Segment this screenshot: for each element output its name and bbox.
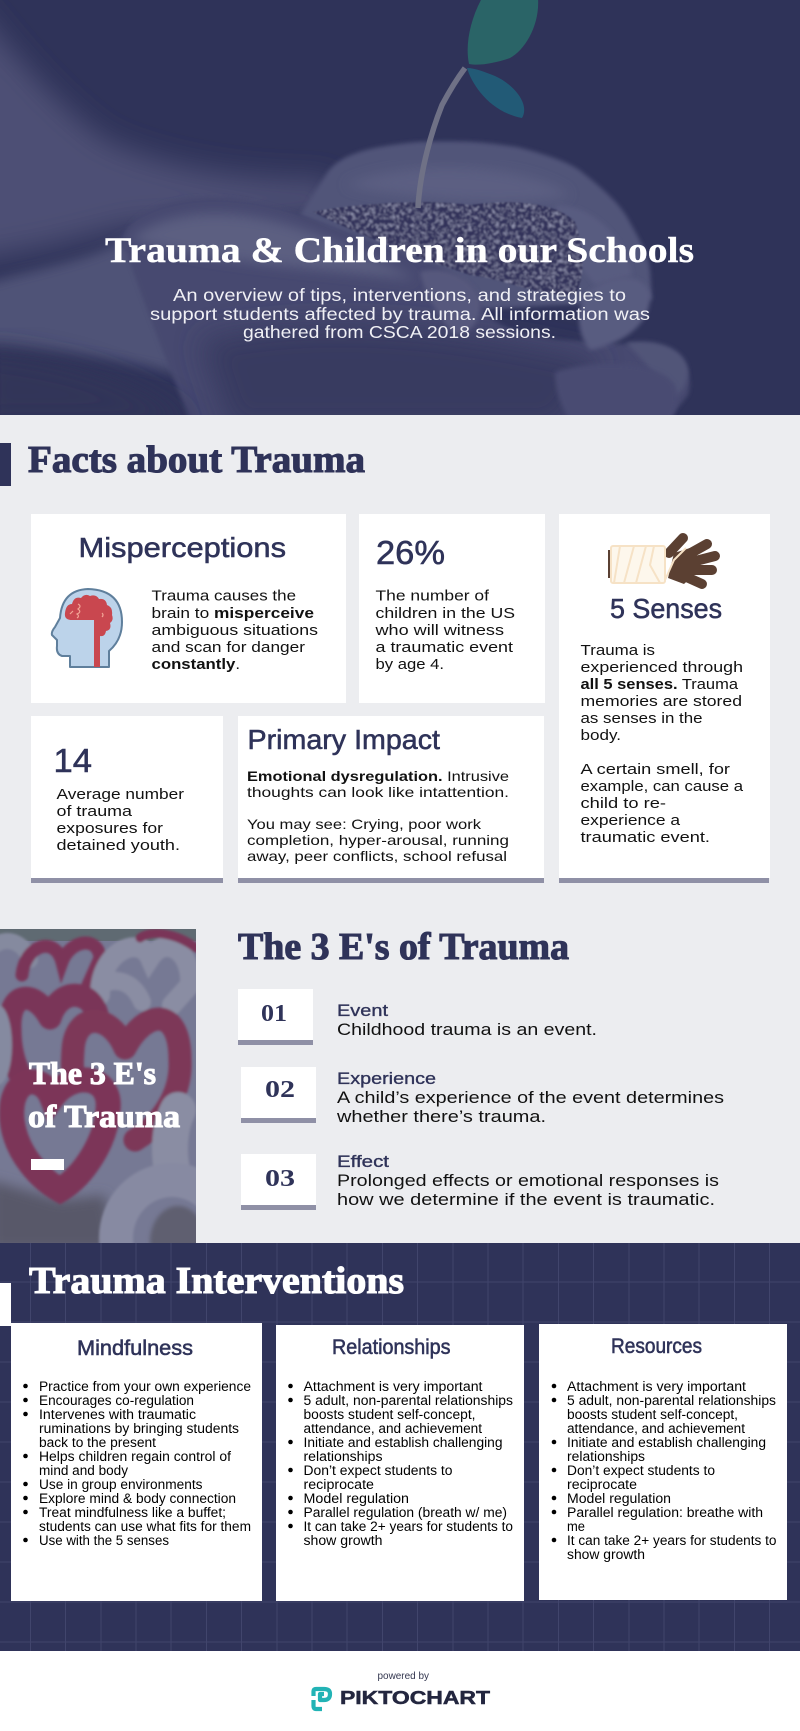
wordmark: PIKTOCHART bbox=[340, 1688, 490, 1708]
text: primary impact body bbox=[247, 768, 509, 864]
text: 26% body: who will witness bbox=[374, 622, 504, 639]
finger tip right bbox=[556, 205, 632, 285]
list: mindfulness: mind and body bbox=[39, 1463, 128, 1478]
text: panel title: of Trauma bbox=[28, 1098, 180, 1134]
panel: mindfulness bbox=[11, 1323, 262, 1601]
text: 26% body: The number of bbox=[376, 588, 490, 604]
heading: The 3 E's of Trauma: The 3 E's of Trauma bbox=[238, 926, 569, 968]
subtitle: An overview of tips, interventions, and strategies to bbox=[173, 285, 626, 305]
panel: 14 bbox=[31, 716, 223, 883]
text: 5 senses body: memories are stored bbox=[580, 693, 742, 710]
list: mindfulness: ruminations by bringing students bbox=[39, 1421, 239, 1436]
text: 5 senses body: as senses in the bbox=[580, 710, 702, 727]
list: mindfulness: students can use what fits for them bbox=[39, 1519, 251, 1534]
list: mindfulness: back to the present bbox=[39, 1435, 156, 1450]
text: 26% body bbox=[374, 588, 515, 673]
list: resources: show growth bbox=[567, 1547, 645, 1562]
list: resources: attendance, and achievement bbox=[567, 1421, 745, 1436]
list: resources: Model regulation bbox=[567, 1491, 671, 1506]
text: 26% body: children in the US bbox=[376, 605, 515, 622]
heading: Trauma Interventions: Trauma Interventions bbox=[29, 1260, 404, 1302]
icon: piktochart logo bbox=[314, 1689, 330, 1709]
number box 01: 01 bbox=[261, 1001, 287, 1027]
lower arm bbox=[0, 241, 171, 376]
photo: hands holding seedling bbox=[0, 0, 690, 430]
list: mindfulness: Practice from your own experience bbox=[39, 1379, 251, 1394]
section heading: Facts about Trauma: Facts about Trauma bbox=[28, 439, 365, 481]
list: relationships: 5 adult, non-parental relationships bbox=[304, 1393, 513, 1408]
text: effect bbox=[337, 1152, 719, 1209]
text: 26% body: by age 4. bbox=[376, 656, 444, 673]
dark bottom left bbox=[0, 350, 195, 425]
panel: hearts photo with 3 E's label bbox=[0, 929, 196, 1243]
icon: bandaged hand bbox=[608, 538, 715, 584]
text: event: Event bbox=[337, 1001, 388, 1020]
subtitle: gathered from CSCA 2018 sessions. bbox=[243, 322, 556, 342]
list: mindfulness: Treat mindfulness like a buffet; bbox=[39, 1505, 226, 1520]
number box 02 bbox=[241, 1067, 316, 1123]
lower hand highlight bbox=[130, 214, 415, 280]
panel: primary impact bbox=[238, 716, 544, 883]
footer: powered by Piktochart: powered by bbox=[378, 1671, 429, 1682]
list: relationships: Attachment is very important bbox=[304, 1379, 483, 1394]
text: 5 senses body: all 5 senses. Trauma bbox=[580, 676, 739, 693]
section: trauma interventions background bbox=[0, 1243, 800, 1651]
text: primary impact body: Emotional dysregulation. Intrusive bbox=[247, 768, 509, 784]
list: relationships: It can take 2+ years for students to bbox=[304, 1519, 513, 1534]
hero banner bbox=[0, 0, 800, 430]
panel: mindfulness: Mindfulness bbox=[77, 1337, 193, 1360]
text: misperceptions body: Trauma causes the bbox=[152, 588, 296, 604]
panel: 5 senses: 5 Senses bbox=[610, 593, 722, 624]
list: resources: Don’t expect students to bbox=[567, 1463, 715, 1478]
text: experience bbox=[336, 1069, 724, 1126]
panel: 26%: 26% bbox=[376, 534, 445, 571]
footer: powered by Piktochart bbox=[0, 1651, 800, 1731]
list: relationships: Model regulation bbox=[304, 1491, 409, 1506]
list: relationships: Initiate and establish challenging bbox=[304, 1435, 502, 1450]
panel: relationships: Relationships bbox=[332, 1336, 450, 1359]
list: mindfulness: Helps children regain control of bbox=[39, 1449, 231, 1464]
number box 01 bbox=[238, 989, 313, 1045]
text: effect: how we determine if the event is traumatic. bbox=[337, 1190, 715, 1209]
list: resources: 5 adult, non-parental relationships bbox=[567, 1393, 776, 1408]
panel: resources: Resources bbox=[611, 1335, 702, 1358]
list: mindfulness: Intervenes with traumatic bbox=[39, 1407, 196, 1422]
icon: head with brain bbox=[52, 589, 122, 667]
number box 03 bbox=[241, 1154, 316, 1210]
text: 5 senses body: example, can cause a bbox=[580, 778, 744, 795]
panel: misperceptions bbox=[31, 514, 346, 703]
text: 5 senses body: A certain smell, for bbox=[580, 761, 730, 778]
fingers bbox=[420, 270, 480, 335]
palm highlight bbox=[372, 172, 550, 198]
text: 26% body: a traumatic event bbox=[376, 639, 514, 656]
subtitle: support students affected by trauma. All information was bbox=[150, 304, 650, 324]
list: resources bbox=[552, 1379, 776, 1562]
text: misperceptions body: constantly . bbox=[152, 656, 240, 673]
text: 5 senses body bbox=[580, 642, 744, 846]
text: experience: whether there’s trauma. bbox=[336, 1107, 546, 1126]
leaf small bbox=[467, 68, 524, 118]
heading: Trauma Interventions bbox=[0, 1260, 404, 1326]
text: misperceptions body bbox=[152, 588, 318, 673]
list: resources: Initiate and establish challenging bbox=[567, 1435, 766, 1450]
upper arm bbox=[0, 25, 322, 262]
number box 03: 03 bbox=[265, 1166, 295, 1192]
list: relationships: Parallel regulation (breath w/ me) bbox=[304, 1505, 507, 1520]
list: resources: reciprocate bbox=[567, 1477, 637, 1492]
panel: resources bbox=[539, 1324, 787, 1600]
list: mindfulness: Use with the 5 senses bbox=[39, 1533, 169, 1548]
lower hand bbox=[127, 216, 690, 415]
title: Trauma & Children in our Schools bbox=[105, 230, 694, 270]
text: event bbox=[337, 1001, 597, 1039]
list: relationships: Don’t expect students to bbox=[304, 1463, 452, 1478]
back hand bbox=[300, 141, 652, 310]
seedling stem bbox=[418, 68, 465, 208]
text: primary impact body: You may see: Crying, poor work bbox=[247, 816, 482, 832]
text: effect: Prolonged effects or emotional responses is bbox=[337, 1171, 719, 1190]
text: 14 body bbox=[56, 786, 184, 854]
text: primary impact body: thoughts can look like intattention. bbox=[247, 784, 509, 800]
text: panel title: The 3 E's bbox=[29, 1055, 156, 1091]
palm shadow bbox=[208, 325, 585, 415]
text: primary impact body: away, peer conflicts, school refusal bbox=[247, 848, 507, 864]
list: resources: It can take 2+ years for students to bbox=[567, 1533, 776, 1548]
list: mindfulness: Encourages co-regulation bbox=[39, 1393, 194, 1408]
list: relationships: boosts student self-concept, bbox=[304, 1407, 476, 1422]
list: relationships: reciprocate bbox=[304, 1477, 374, 1492]
text: misperceptions body: brain to misperceive bbox=[152, 605, 314, 622]
list: resources: Attachment is very important bbox=[567, 1379, 746, 1394]
panel: 5 senses bbox=[559, 514, 770, 883]
text: experience: Experience bbox=[337, 1069, 436, 1088]
text: 5 senses body: experience a bbox=[580, 812, 681, 829]
list: relationships: show growth bbox=[304, 1533, 382, 1548]
list: relationships: attendance, and achievement bbox=[304, 1421, 482, 1436]
text: 5 senses body: child to re- bbox=[580, 795, 666, 812]
text: 5 senses body: body. bbox=[580, 727, 621, 744]
soil bbox=[313, 202, 582, 295]
text: 14 body: exposures for bbox=[56, 820, 163, 837]
list: resources: Parallel regulation: breathe with bbox=[567, 1505, 763, 1520]
text: 14 body: detained youth. bbox=[56, 837, 180, 854]
text: effect: Effect bbox=[337, 1152, 389, 1171]
list: mindfulness: Explore mind & body connection bbox=[39, 1491, 236, 1506]
text: misperceptions body: ambiguous situations bbox=[152, 622, 318, 639]
list: relationships: relationships bbox=[304, 1449, 383, 1464]
text: 5 senses body: Trauma is bbox=[580, 642, 655, 659]
panel: primary impact: Primary Impact bbox=[248, 724, 440, 755]
panel: 14: 14 bbox=[54, 742, 92, 779]
text: 5 senses body: traumatic event. bbox=[580, 829, 710, 846]
text: experience: A child’s experience of the event determines bbox=[337, 1088, 724, 1107]
list: mindfulness bbox=[23, 1379, 251, 1548]
panel: misperceptions: Misperceptions bbox=[78, 532, 286, 563]
list: resources: me bbox=[567, 1519, 585, 1534]
text: 14 body: of trauma bbox=[56, 803, 133, 820]
list: relationships bbox=[288, 1379, 513, 1548]
text: misperceptions body: and scan for danger bbox=[152, 639, 305, 656]
panel: 26% bbox=[359, 514, 545, 703]
subtitle bbox=[150, 285, 650, 342]
text: 5 senses body: experienced through bbox=[580, 659, 743, 676]
panel: relationships bbox=[276, 1325, 524, 1601]
list: mindfulness: Use in group environments bbox=[39, 1477, 203, 1492]
text: panel title bbox=[28, 1055, 180, 1134]
list: resources: relationships bbox=[567, 1449, 645, 1464]
text: primary impact body: completion, hyper-arousal, running bbox=[247, 832, 509, 848]
number box 02: 02 bbox=[265, 1077, 295, 1103]
dash bbox=[31, 1159, 64, 1170]
text: event: Childhood trauma is an event. bbox=[337, 1020, 597, 1039]
text: 14 body: Average number bbox=[56, 786, 184, 803]
list: resources: boosts student self-concept, bbox=[567, 1407, 738, 1422]
leaf large bbox=[468, 0, 538, 65]
